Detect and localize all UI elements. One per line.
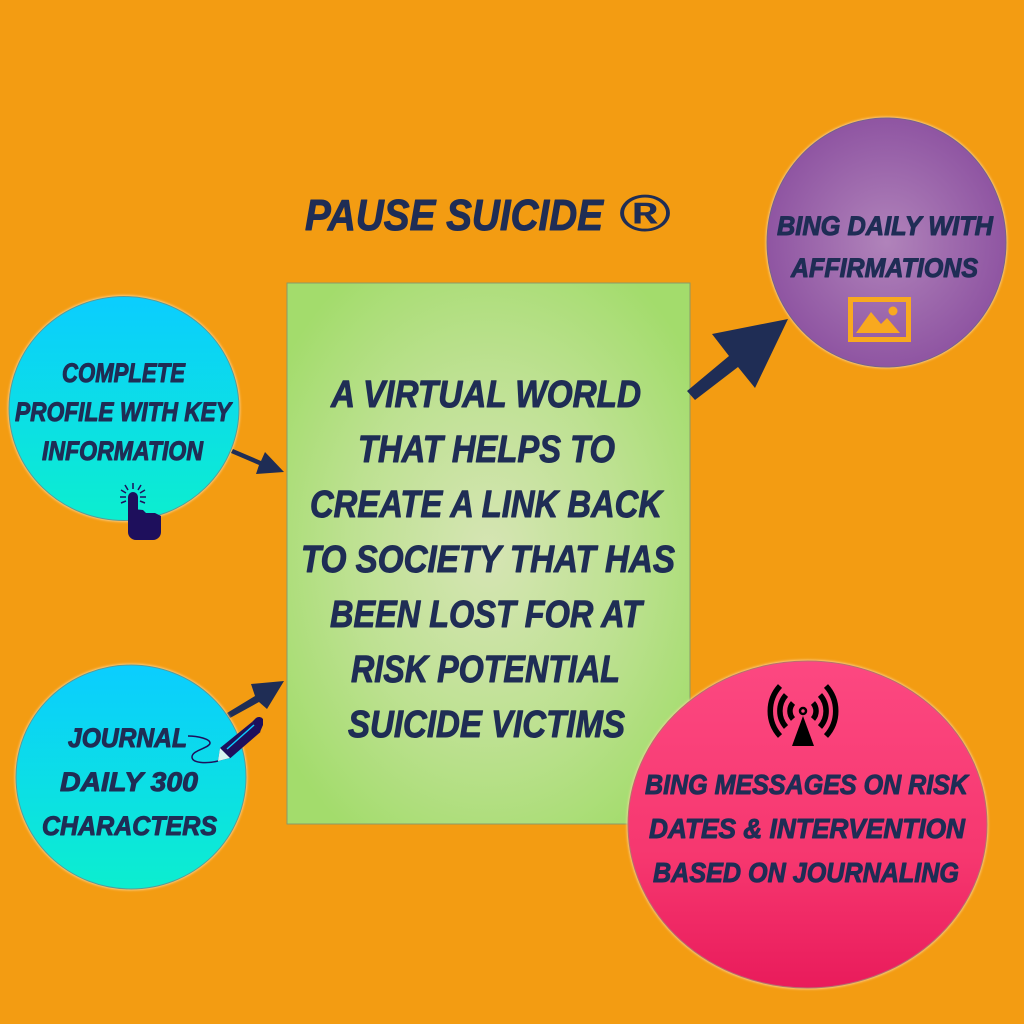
- text block: affirmations: BING DAILY WITH: [777, 211, 994, 241]
- panel: affirmations circle: [766, 117, 1007, 368]
- text block: central description: SUICIDE VICTIMS: [348, 704, 625, 746]
- text block: journal: CHARACTERS: [42, 811, 217, 841]
- text block: complete profile: INFORMATION: [42, 436, 204, 466]
- text block: affirmations: AFFIRMATIONS: [790, 253, 978, 283]
- text block: central description: BEEN LOST FOR AT: [330, 594, 644, 636]
- text block: messages: DATES & INTERVENTION: [649, 813, 966, 844]
- text block: affirmations: [777, 211, 994, 283]
- text block: journal: [42, 723, 217, 841]
- text block: central description: [301, 374, 675, 746]
- text block: messages: BING MESSAGES ON RISK: [645, 769, 970, 800]
- text block: central description: THAT HELPS TO: [358, 429, 615, 471]
- text block: central description: RISK POTENTIAL: [351, 649, 620, 691]
- text block: complete profile: [15, 358, 233, 466]
- icon: pencil with scribble: [188, 717, 263, 763]
- panel: journal circle: [15, 664, 263, 890]
- arrow: journal to centre: [227, 681, 284, 718]
- panel: messages circle: [627, 660, 988, 989]
- icon: tapping hand: [120, 483, 161, 540]
- text block: messages: [645, 769, 970, 888]
- text block: journal: JOURNAL: [68, 723, 187, 753]
- panel: central description: [287, 283, 690, 824]
- arrow: profile to centre: [231, 449, 284, 474]
- title: PAUSE SUICIDE: [305, 191, 604, 240]
- text block: messages: BASED ON JOURNALING: [653, 857, 959, 888]
- text block: complete profile: PROFILE WITH KEY: [15, 397, 233, 427]
- panel: complete profile circle: [8, 296, 240, 540]
- text block: central description: A VIRTUAL WORLD: [330, 374, 641, 416]
- icon: broadcast antenna: [770, 686, 836, 746]
- arrow: centre to affirmations: [687, 319, 788, 400]
- title: ®: [619, 185, 671, 243]
- icon: image: [850, 300, 908, 340]
- text block: complete profile: COMPLETE: [62, 358, 186, 388]
- text block: central description: CREATE A LINK BACK: [310, 484, 664, 526]
- text block: central description: TO SOCIETY THAT HAS: [301, 539, 675, 581]
- text block: journal: DAILY 300: [60, 767, 198, 797]
